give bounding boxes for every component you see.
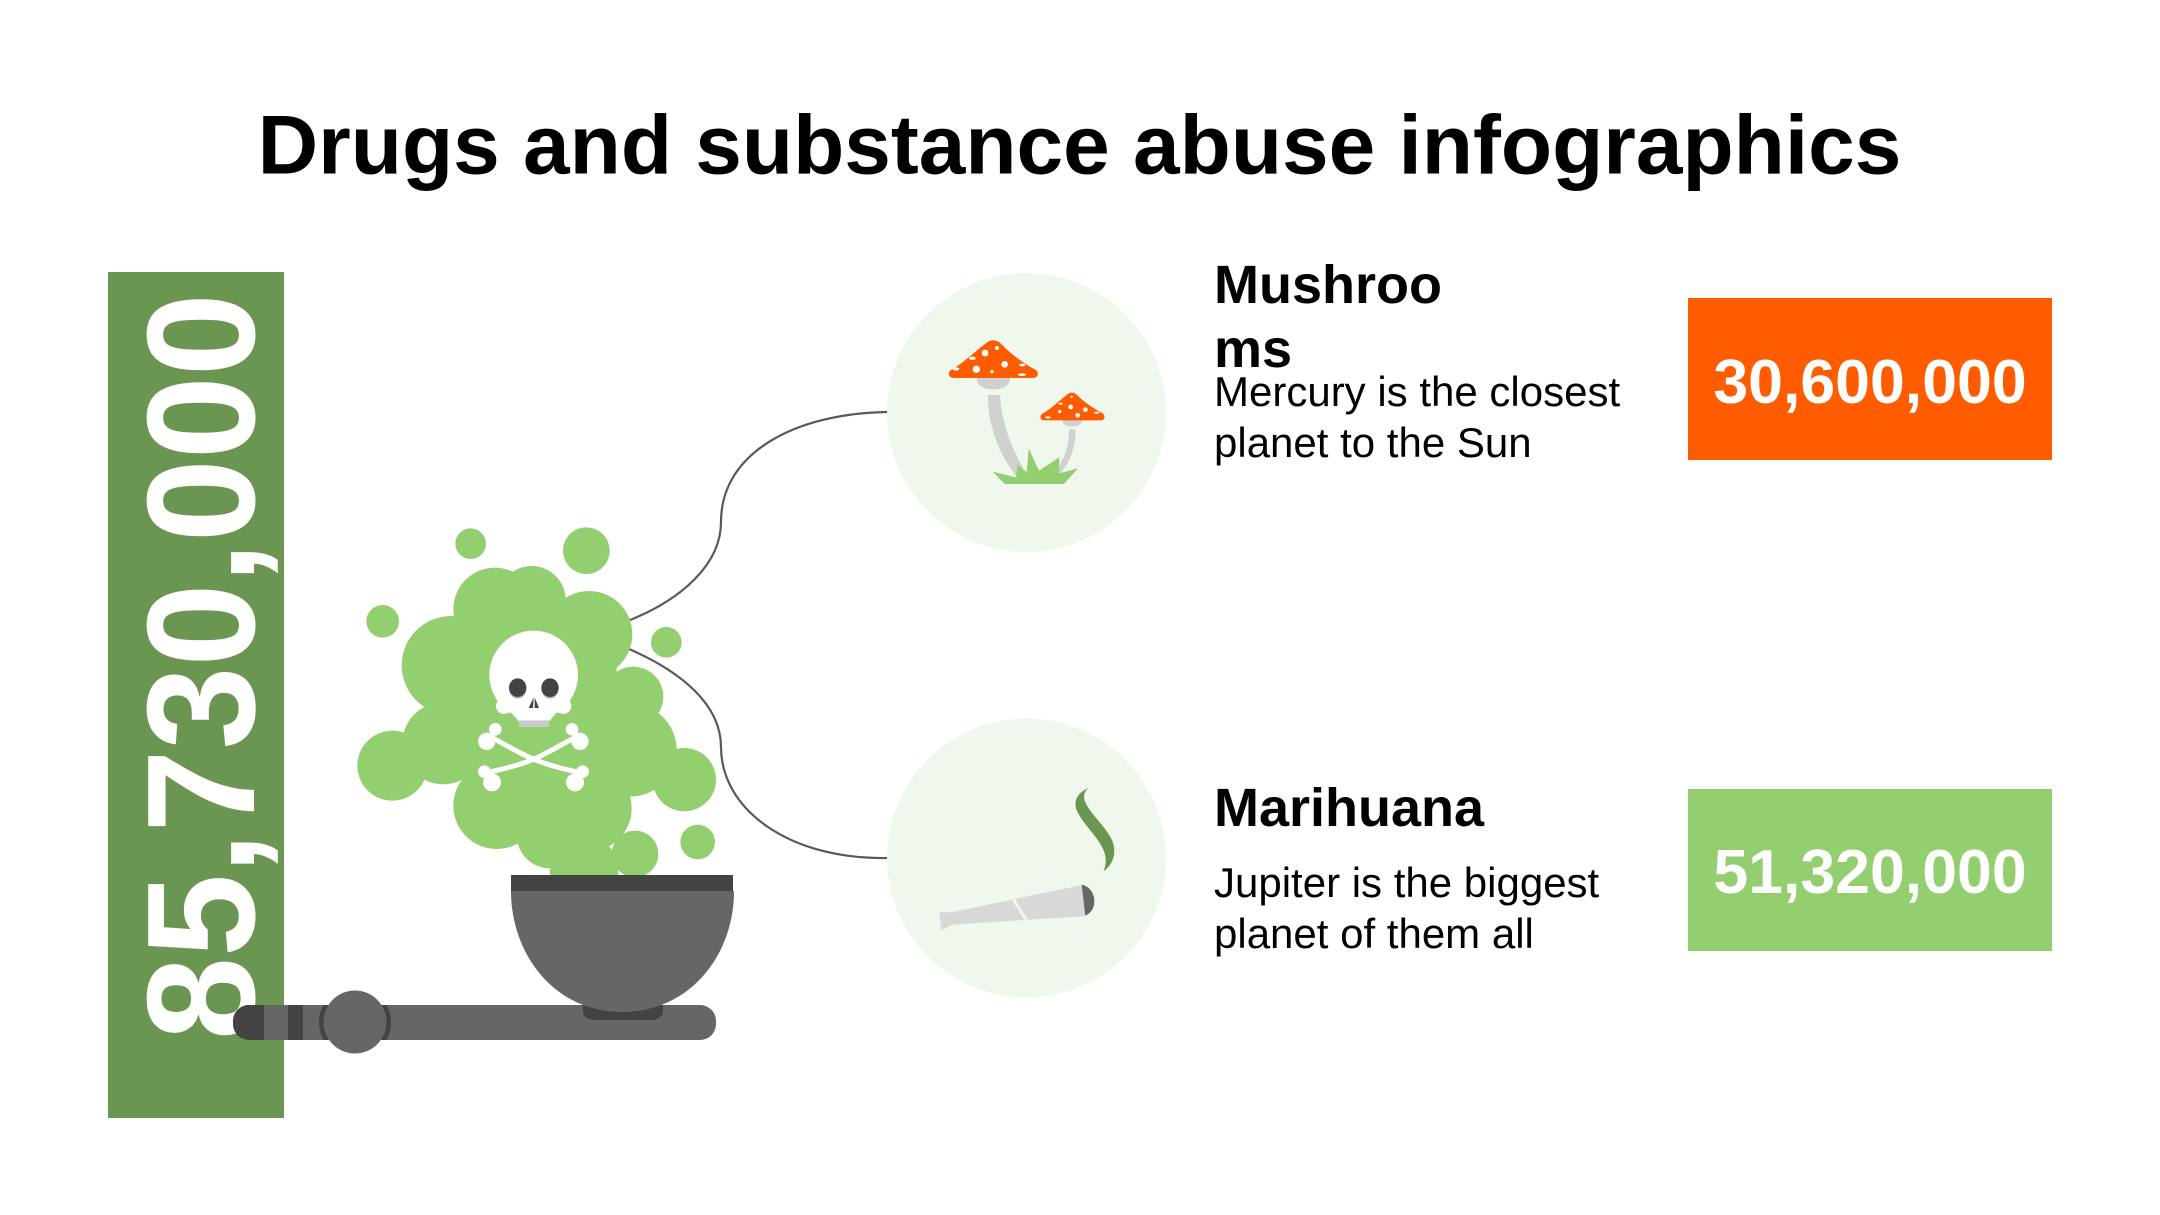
total figure bar: 85,730,000: [116, 293, 287, 1040]
text: mushrooms: Mercury is the closest: [1214, 368, 1620, 415]
value: marihuana: [1688, 789, 2052, 951]
text: mushrooms: [1214, 255, 1620, 466]
value: mushrooms: [1688, 298, 2052, 460]
connector: smoke to marihuana: [629, 649, 888, 858]
skull: [489, 631, 578, 727]
title: Drugs and substance abuse infographics: [258, 98, 1901, 192]
text: mushrooms: Mushroo: [1214, 255, 1442, 315]
icon: joint with smoke: [939, 788, 1114, 930]
text: marihuana: Marihuana: [1214, 778, 1485, 838]
text: mushrooms: planet to the Sun: [1214, 419, 1532, 466]
text: marihuana: [1214, 778, 1600, 957]
crossbones: [478, 723, 589, 791]
smoke cloud: [357, 527, 716, 877]
text: mushrooms: ms: [1214, 319, 1292, 379]
connector: smoke to mushrooms: [630, 412, 888, 620]
text: marihuana: Jupiter is the biggest: [1214, 859, 1600, 906]
value: marihuana: 51,320,000: [1713, 837, 2027, 907]
icon: pipe: [233, 875, 734, 1054]
panel: marihuana circle: [887, 718, 1166, 998]
icon: skull and crossbones: [478, 631, 589, 791]
icon: mushrooms: [949, 340, 1105, 484]
value: mushrooms: 30,600,000: [1713, 347, 2027, 417]
panel: mushrooms circle: [887, 273, 1166, 552]
text: marihuana: planet of them all: [1214, 910, 1534, 957]
